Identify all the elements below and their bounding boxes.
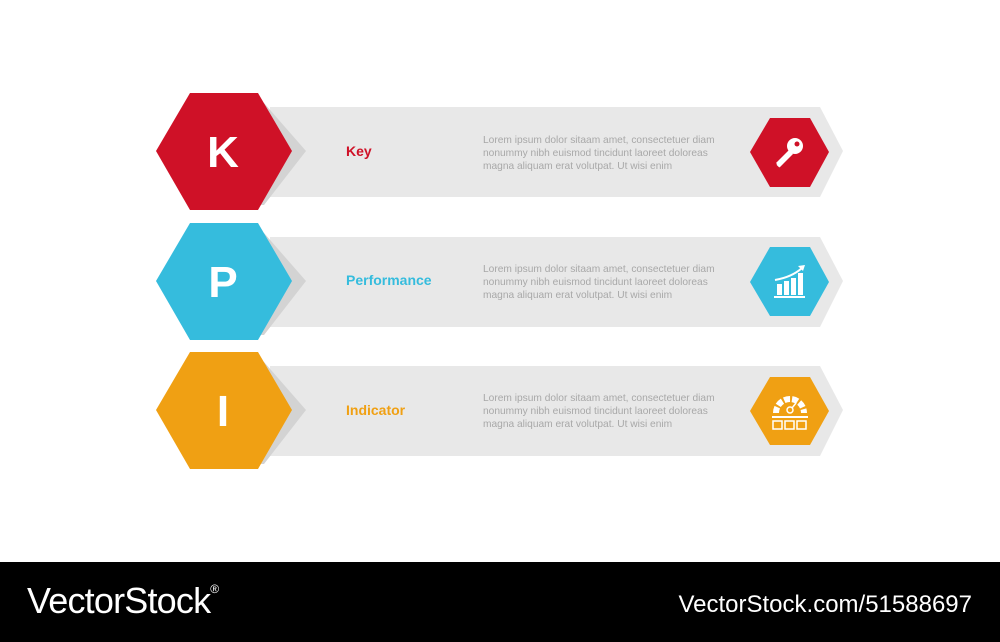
icon: chart [750, 247, 829, 316]
icon: key [750, 118, 829, 187]
shadow hex: performance [240, 233, 306, 335]
icon: gauge [750, 377, 829, 445]
band: key [270, 107, 843, 197]
hexagon: I [156, 352, 292, 469]
description: key: magna aliquam erat volutpat. Ut wisi enim [483, 161, 672, 172]
shadow hex: indicator [240, 362, 306, 464]
hexagon: I: I [217, 387, 229, 436]
title: Key: Key [346, 143, 372, 159]
description: performance: Lorem ipsum dolor sitaam amet, consectetuer diam [483, 264, 715, 275]
title: Performance: Performance [346, 272, 432, 288]
description: performance: nonummy nibh euismod tincidunt laoreet doloreas [483, 277, 708, 288]
description: key: nonummy nibh euismod tincidunt laoreet doloreas [483, 148, 708, 159]
footer bar [0, 562, 1000, 642]
hexagon: P [156, 223, 292, 340]
band: indicator [270, 366, 843, 456]
footer: logo: ® [210, 582, 219, 596]
row: Indicator [156, 352, 843, 469]
description: performance: magna aliquam erat volutpat. Ut wisi enim [483, 290, 672, 301]
shadow hex: key [240, 103, 306, 205]
footer: image id: VectorStock.com/51588697 [678, 591, 972, 618]
hexagon: K: K [207, 128, 239, 177]
hexagon: K [156, 93, 292, 210]
description: indicator: nonummy nibh euismod tincidunt laoreet doloreas [483, 406, 708, 417]
title: Indicator: Indicator [346, 402, 406, 418]
row: Key [156, 93, 843, 210]
row: Performance [156, 223, 843, 340]
hexagon: P: P [208, 258, 238, 307]
description: indicator: Lorem ipsum dolor sitaam amet, consectetuer diam [483, 393, 715, 404]
footer: logo: VectorStock [27, 580, 210, 621]
description: indicator: magna aliquam erat volutpat. Ut wisi enim [483, 419, 672, 430]
band: performance [270, 237, 843, 327]
description: key: Lorem ipsum dolor sitaam amet, consectetuer diam [483, 135, 715, 146]
